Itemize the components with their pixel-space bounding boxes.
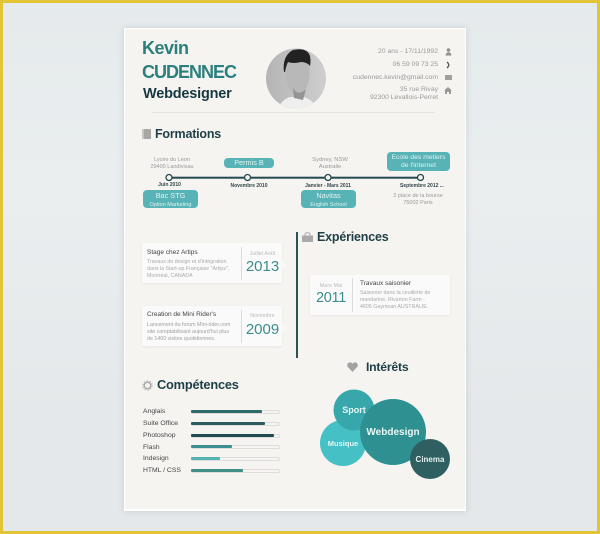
job description	[147, 322, 230, 342]
school: Lycée du Leon: 29400 Landivisau	[150, 164, 194, 170]
bar fill: HTML / CSS	[191, 469, 243, 472]
profile photo	[266, 48, 326, 108]
name: Kevin: Kevin	[142, 38, 189, 58]
paper sheet	[124, 28, 466, 511]
icon: phone	[446, 62, 450, 68]
job title: Webdesigner	[143, 86, 232, 102]
bar track: Anglais	[191, 410, 280, 414]
heading: Expériences: Expériences	[317, 230, 388, 244]
school: Lycée du Leon: Lycée du Leon	[154, 157, 190, 163]
card pointer: 2009	[282, 323, 287, 333]
job description	[147, 259, 229, 279]
pill: Permis B	[224, 158, 274, 168]
skill: Flash: Flash	[143, 444, 160, 450]
label: Sport: Sport	[342, 405, 366, 415]
bubble: Sport	[334, 390, 374, 430]
header divider	[152, 112, 435, 113]
date: Juillet Août	[250, 251, 275, 257]
separator	[352, 278, 353, 312]
date: Novembre	[250, 313, 275, 319]
contact: address: 35 rue Rivay	[400, 86, 438, 93]
skill: Photoshop: Photoshop	[143, 432, 176, 439]
pill: Ecole des metiers: Ecole des metiers	[391, 154, 446, 161]
job description: dans la Start-up Française "Artips",	[147, 266, 229, 272]
school: Sydney	[312, 157, 348, 170]
heading: Intérêts: Intérêts	[366, 360, 408, 374]
timeline	[165, 174, 424, 182]
school: Sydney: Australie	[319, 164, 341, 170]
pill: Bac STG: Bac STG	[156, 191, 185, 200]
job description: Saisonier dans la ceuillette de	[360, 290, 430, 296]
date: Mars Mai	[320, 283, 342, 289]
bar fill: Flash	[191, 445, 232, 448]
icon: briefcase	[302, 232, 313, 242]
pill: Bac STG: Option Marketing	[150, 202, 191, 208]
year: 2011	[316, 290, 346, 306]
card pointer: 2013	[282, 260, 287, 270]
job title: Creation de Mini Rider's	[147, 311, 216, 318]
job description: Travaux de design et d'intégration	[147, 259, 226, 265]
name: Cudennec: CUDENNEC	[142, 62, 236, 82]
icon: envelope	[445, 75, 452, 80]
icon: book	[142, 129, 151, 139]
date: Janvier - Mars 2011: Janvier - Mars 2011	[305, 183, 351, 189]
bubble: Cinema: Cinema	[416, 455, 445, 464]
job title: Stage chez Artips	[147, 249, 198, 256]
pill: Ecole des metiers: de l'internet	[401, 162, 436, 169]
job description: de 1400 visites quotidiennes.	[147, 336, 215, 342]
bar track: Suite Office	[191, 422, 280, 426]
bar track: Indesign	[191, 457, 280, 461]
contact: age: 20 ans - 17/11/1992	[378, 48, 438, 55]
card: Stage chez Artips	[142, 243, 282, 283]
school: 2 place de la bourse: 2 place de la bourse	[393, 193, 443, 199]
bar fill: Photoshop	[191, 434, 274, 437]
heading: Compétences: Compétences	[157, 377, 239, 392]
bar fill: Indesign	[191, 457, 220, 460]
card: Mini Rider's	[142, 306, 282, 346]
icon: gear	[142, 380, 153, 391]
contact: address	[370, 86, 438, 100]
bar track: HTML / CSS	[191, 469, 280, 473]
bubble: Webdesign: Webdesign	[366, 427, 420, 438]
separator	[241, 247, 242, 280]
school: Lycée du Leon	[150, 157, 194, 170]
contact: email: cudennec.kevin@gmail.com	[353, 74, 438, 81]
school: 2 place de la bourse	[393, 193, 443, 206]
icon: house	[444, 87, 452, 94]
pill: Bac STG	[143, 190, 198, 208]
job title: Travaux saisonier	[360, 280, 411, 287]
job description: mandarine. Rivarton Farm -	[360, 297, 425, 303]
skill: HTML / CSS: HTML / CSS	[143, 466, 181, 474]
pill: Permis B: Permis B	[234, 158, 264, 167]
date: Septembre 2012: Septembre 2012 ...	[400, 183, 444, 189]
vertical divider	[296, 232, 298, 358]
skill: Suite Office: Suite Office	[143, 420, 178, 427]
bar track: Photoshop	[191, 434, 280, 438]
pill: Navitas: English School	[310, 202, 347, 208]
heading: Formations: Formations	[155, 127, 221, 141]
pill: Navitas: Navitas	[316, 191, 341, 200]
date: Juin 2010: Juin 2010	[158, 182, 181, 188]
pill: Ecole des metiers	[387, 152, 450, 171]
school: Sydney: Sydney, NSW	[312, 157, 348, 163]
school: 2 place de la bourse: 75002 Paris	[403, 200, 433, 206]
icon: heart	[347, 362, 358, 372]
bar fill: Anglais	[191, 410, 262, 413]
contact: phone: 06 59 09 73 25	[393, 61, 438, 68]
bar track: Flash	[191, 445, 280, 449]
bubble: Musique: Musique	[328, 439, 358, 448]
job description: Lancement du forum Mini-rider.com	[147, 322, 230, 328]
job description	[360, 290, 430, 310]
separator	[241, 310, 242, 343]
skill: Indesign: Indesign	[143, 455, 169, 462]
job description: 4605 Gaymoan AUSTRALIE.	[360, 304, 428, 310]
year: 2013	[246, 258, 279, 275]
bubble chart	[320, 390, 450, 479]
job description: Montréal, CANADA	[147, 273, 193, 279]
pill: Navitas	[301, 190, 356, 208]
skills chart	[143, 408, 280, 474]
contact: address: 92300 Levallois-Perret	[370, 94, 438, 100]
year: 2009	[246, 321, 279, 338]
job description: site comptabilisant aujourd'hui plus	[147, 329, 229, 335]
card: Travaux saisonier	[310, 275, 450, 315]
icon: person	[446, 48, 452, 56]
bar fill: Suite Office	[191, 422, 265, 425]
date: Novembre 2010: Novembre 2010	[231, 183, 267, 189]
skill: Anglais: Anglais	[143, 408, 165, 414]
